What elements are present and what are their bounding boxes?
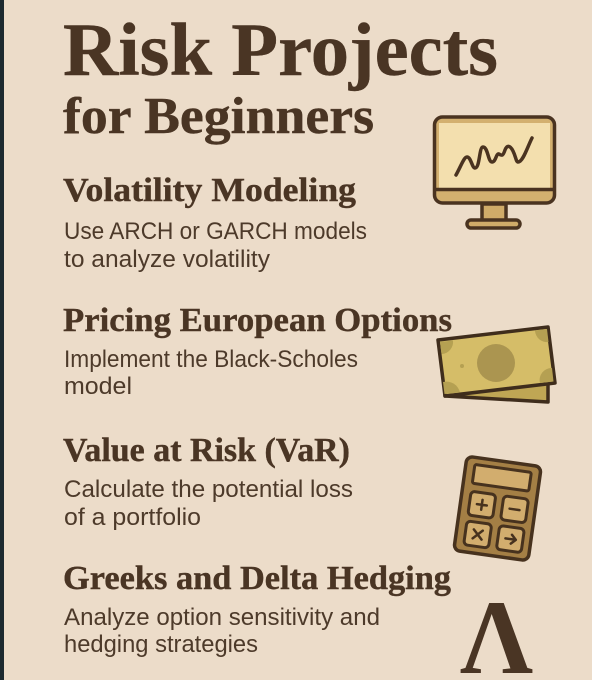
section: pricing european options: Implement the Black-Scholes [64,346,358,373]
section: pricing european options: model [64,373,132,400]
section: pricing european options [63,302,452,400]
section: value at risk: Calculate the potential loss [64,476,353,503]
section: volatility modeling [63,172,367,273]
section: value at risk [63,432,353,531]
section: greeks and delta hedging [63,560,451,658]
section: volatility modeling: Use ARCH or GARCH models [64,218,367,245]
section: value at risk: Value at Risk (VaR) [63,432,350,469]
title [63,9,498,145]
icon: banknotes [438,327,555,402]
icon: calculator [454,456,541,561]
section: greeks and delta hedging: Greeks and Delta Hedging [63,560,451,597]
title: for Beginners [63,88,374,145]
icon: computer monitor with chart [434,117,554,228]
section: greeks and delta hedging: Analyze option sensitivity and [64,604,380,631]
title: Risk Projects [63,9,498,92]
section: volatility modeling: Volatility Modeling [63,172,356,209]
section: volatility modeling: to analyze volatility [64,246,270,273]
section: greeks and delta hedging: hedging strategies [64,631,258,658]
section: pricing european options: Pricing European Options [63,302,452,339]
section: value at risk: of a portfolio [64,504,201,531]
